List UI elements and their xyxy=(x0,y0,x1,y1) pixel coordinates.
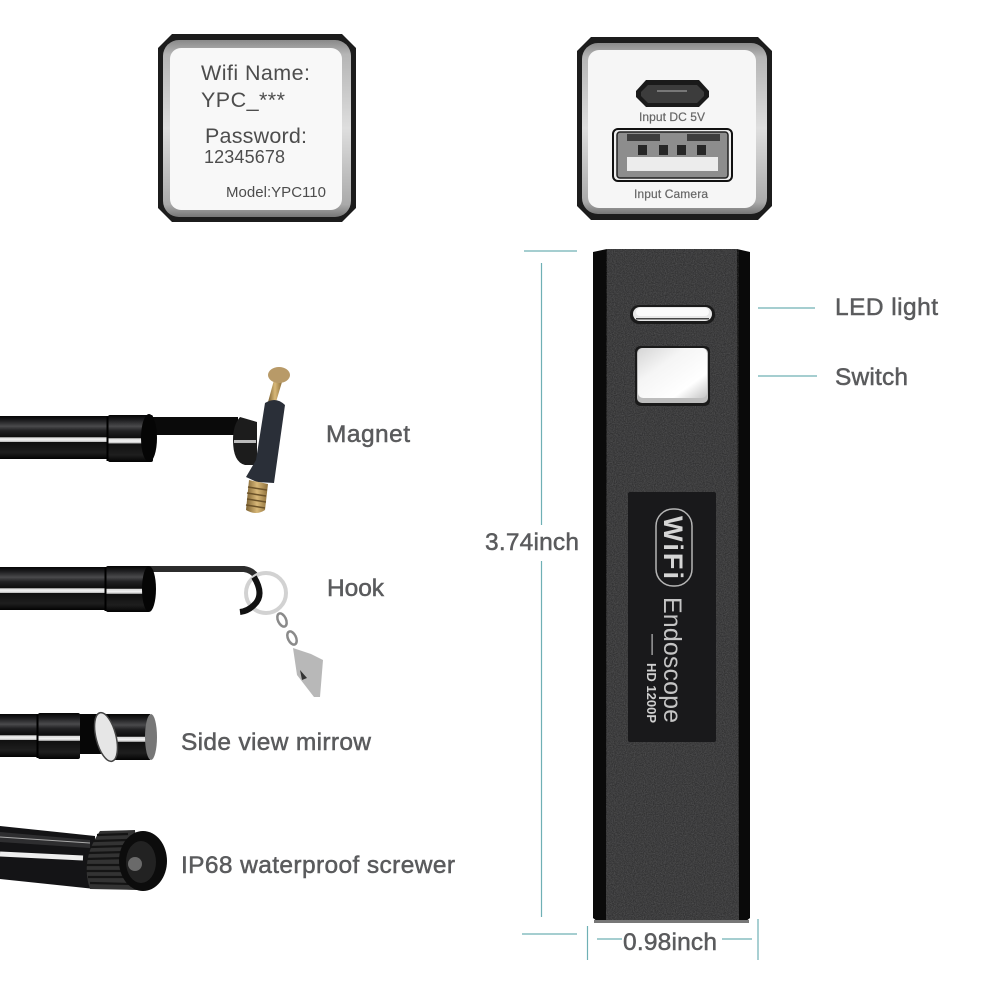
model text: Model:YPC110 xyxy=(226,184,326,201)
icon: USB port xyxy=(613,129,732,181)
port label: input DC 5V: Input DC 5V xyxy=(639,110,705,124)
password heading: Password: xyxy=(205,124,307,148)
wifi name value: YPC_*** xyxy=(201,88,286,112)
LED light window xyxy=(630,305,715,324)
wifi badge: WiFi xyxy=(658,516,688,579)
callout line: LED xyxy=(758,307,815,309)
accessory: waterproof screwer xyxy=(0,826,167,891)
dimension: width xyxy=(522,919,758,960)
icon: micro USB port xyxy=(636,80,709,107)
product name: Endoscope xyxy=(658,597,686,723)
label: hook: Hook xyxy=(327,575,385,602)
accessory: magnet xyxy=(0,367,290,513)
password value: 12345678 xyxy=(204,147,285,167)
resolution: HD 1200P xyxy=(644,663,659,723)
device: wifi endoscope body xyxy=(593,249,750,923)
label: LED light: LED light xyxy=(835,294,938,321)
callout line: switch xyxy=(758,375,817,377)
brand panel xyxy=(628,492,716,742)
switch button xyxy=(635,346,710,406)
panel: ports label xyxy=(577,37,772,220)
panel: wifi name label xyxy=(158,34,356,222)
dimension label: height: 3.74inch xyxy=(485,529,579,556)
dimension label: width: 0.98inch xyxy=(623,929,717,956)
port label: input camera: Input Camera xyxy=(634,187,708,201)
label: waterproof screwer: IP68 waterproof screwer xyxy=(181,852,455,879)
accessory: hook xyxy=(0,566,323,697)
wifi badge xyxy=(656,509,692,586)
label: side view mirror: Side view mirrow xyxy=(181,729,371,756)
label: switch: Switch xyxy=(835,364,908,391)
label: magnet: Magnet xyxy=(326,421,410,448)
dimension: height xyxy=(524,251,577,917)
wifi name heading: Wifi Name: xyxy=(201,61,310,85)
accessory: side view mirror xyxy=(0,710,157,764)
